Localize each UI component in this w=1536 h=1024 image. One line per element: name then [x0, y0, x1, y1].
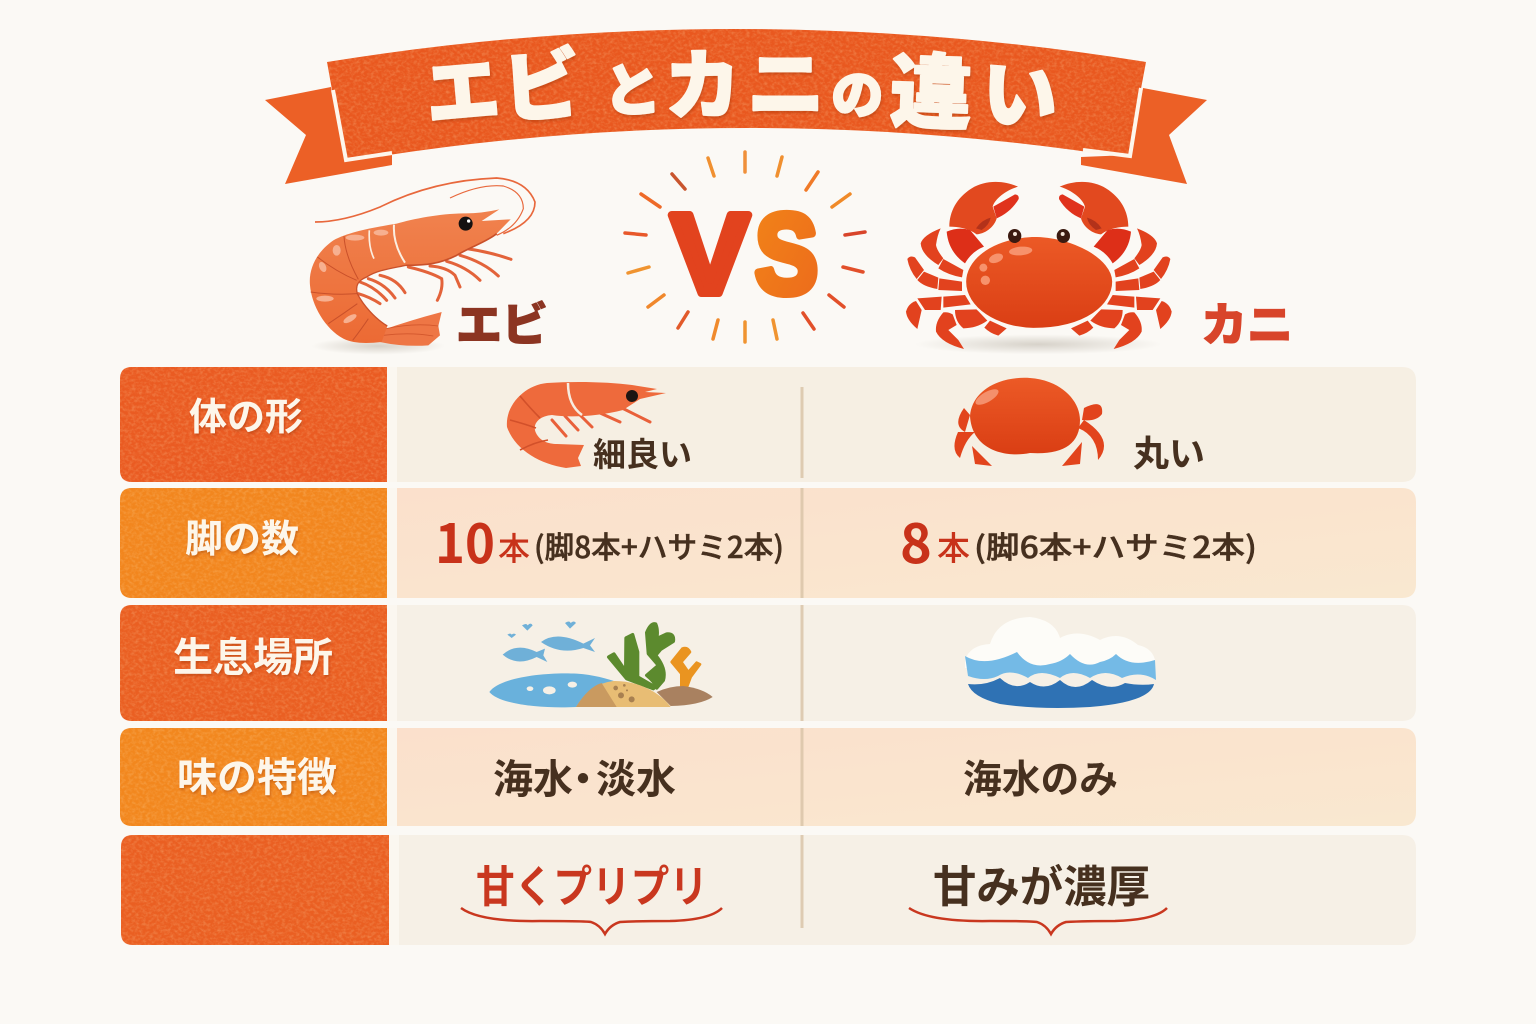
- ground shadow: [915, 334, 1162, 354]
- shrimp taste text: [461, 851, 722, 934]
- shrimp leg count: (脚8本+ハサミ2本): [534, 523, 784, 567]
- row 1 label: [120, 367, 387, 482]
- shrimp leg count: [435, 500, 784, 579]
- shrimp water text: 海水: [493, 747, 573, 805]
- row 1: body shape: [120, 367, 1416, 482]
- pool: [489, 673, 617, 707]
- title text: ビ: [500, 41, 584, 134]
- shrimp water text: 淡水: [596, 747, 676, 805]
- column divider: [800, 387, 804, 928]
- crab taste text: 甘みが濃厚: [933, 851, 1150, 915]
- row 2 label: [120, 488, 387, 598]
- antennae: [315, 178, 535, 234]
- row 4 label: [120, 728, 387, 826]
- tail fan: [380, 312, 442, 346]
- fish and hearts: [503, 621, 595, 662]
- shell highlights: [316, 230, 388, 325]
- title text: ニ: [747, 41, 825, 129]
- row 5 content background: [389, 835, 1416, 945]
- title text: 違: [888, 47, 974, 141]
- small crab: [954, 378, 1104, 466]
- ribbon left tail: [265, 87, 392, 184]
- shrimp shape text: 細良い: [593, 428, 692, 476]
- crab leg count: [900, 500, 1257, 579]
- burst rays: [625, 152, 865, 342]
- crab eyes: [1008, 229, 1021, 243]
- waves icon: [965, 617, 1156, 708]
- label: カニ: カニ: [1201, 289, 1293, 355]
- shrimp water text: ・: [563, 747, 603, 805]
- shrimp taste text: 甘くプリプリ: [476, 851, 708, 915]
- title text: [422, 41, 1061, 142]
- right claw and legs: [1059, 182, 1172, 349]
- row 1 content background: [387, 367, 1416, 482]
- crab water text: 海水のみ: [963, 749, 1118, 805]
- row 2 content background: [387, 488, 1416, 598]
- title text: カ: [664, 44, 741, 130]
- row 3 content background: [387, 605, 1416, 721]
- underside shading: [406, 234, 497, 265]
- crab leg count: (脚6本+ハサミ2本): [974, 523, 1257, 567]
- comparison table: [120, 367, 1416, 945]
- title text: と: [602, 58, 662, 125]
- row 1 heading: 体の形: [189, 386, 303, 441]
- ground shadow: [312, 337, 445, 355]
- crab shape text: 丸い: [1133, 425, 1205, 477]
- left claw and legs: [906, 182, 1019, 349]
- ribbon right tail: [1081, 88, 1207, 184]
- row 3 label: [120, 605, 387, 721]
- coral: [672, 648, 700, 686]
- label: エビ: エビ: [456, 289, 548, 355]
- title text: エ: [422, 48, 503, 137]
- eye: [459, 217, 473, 231]
- row 4: taste: [120, 728, 1416, 826]
- row 3 heading: 生息場所: [173, 625, 333, 683]
- sea scene icon: [489, 621, 713, 707]
- seaweed: [609, 635, 655, 689]
- row 2: leg count: [120, 488, 1416, 598]
- title text: い: [979, 52, 1061, 142]
- title text: の: [831, 67, 884, 126]
- crab illustration: [906, 182, 1172, 354]
- body: [310, 209, 511, 343]
- ribbon main band: [327, 29, 1146, 162]
- row 2 heading: 脚の数: [185, 508, 299, 563]
- shrimp leg count: 本: [498, 524, 530, 570]
- VS letters: S: [755, 191, 818, 317]
- VS letters: V: [671, 191, 749, 317]
- crab leg count: 8: [900, 500, 932, 579]
- VS letters: [671, 191, 818, 317]
- sand mound: [576, 681, 671, 707]
- row 4 content background: [387, 728, 1416, 826]
- VS burst: [625, 152, 865, 342]
- shrimp leg count: 10: [435, 500, 495, 579]
- title ribbon: [265, 29, 1207, 184]
- row 5 label block: [121, 835, 389, 945]
- row 4 heading: 味の特徴: [177, 745, 337, 803]
- shrimp illustration: [310, 178, 535, 355]
- shell segments: [311, 236, 368, 340]
- row 3: habitat: [120, 605, 1416, 721]
- legs: [358, 249, 511, 304]
- white shell bands: [369, 230, 374, 259]
- crab taste text: [909, 851, 1167, 934]
- carapace: [965, 236, 1113, 329]
- crab leg count: 本: [937, 522, 970, 570]
- rock: [657, 686, 713, 706]
- row 5: flavour: [121, 835, 1416, 945]
- small shrimp: [507, 382, 666, 468]
